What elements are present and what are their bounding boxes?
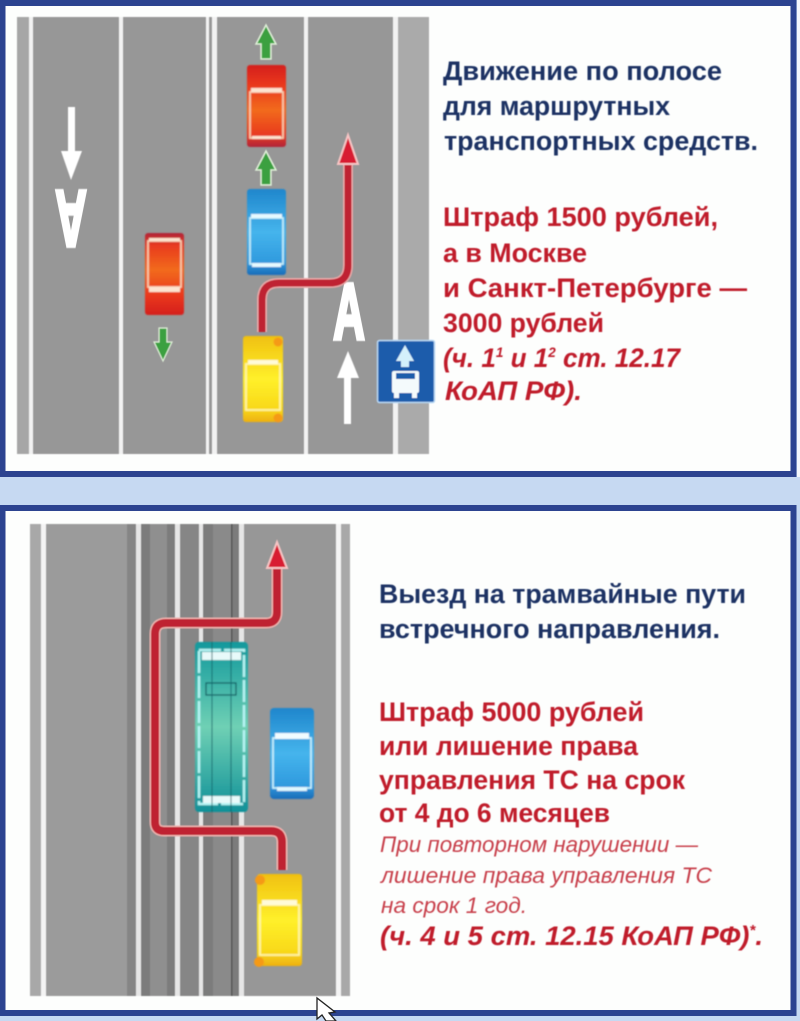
road marking: letter A: А bbox=[333, 267, 365, 356]
heading: tram tracks violation: Выезд на трамвайные пути bbox=[379, 579, 746, 609]
text: law reference: * bbox=[749, 922, 757, 939]
text: repeat offence note: При повторном нарушении — bbox=[380, 832, 699, 857]
text: law reference: (ч. 4 и 5 ст. 12.15 КоАП РФ) bbox=[380, 921, 743, 951]
text: bus lane fine: ст. 12.17 bbox=[556, 343, 682, 373]
road: tram tracks scene bbox=[30, 524, 350, 996]
text: repeat offence note bbox=[379, 832, 712, 918]
text: bus lane fine: Штраф 1500 рублей, bbox=[443, 202, 718, 232]
panel: bus lane violation bbox=[2, 0, 800, 477]
icon: small green arrow down bbox=[154, 328, 172, 361]
car: red, oncoming bbox=[145, 233, 184, 315]
bus: teal bbox=[195, 642, 248, 812]
text: repeat offence note: лишение права управления ТС bbox=[379, 863, 712, 888]
heading: bus lane violation: транспортных средств. bbox=[444, 126, 758, 156]
text: law reference: . bbox=[755, 921, 763, 951]
text: bus lane fine: и Санкт-Петербурге — bbox=[443, 273, 747, 303]
heading: bus lane violation: для маршрутных bbox=[443, 91, 670, 121]
panel: tram tracks violation bbox=[2, 508, 794, 1013]
text: bus lane fine: 3000 рублей bbox=[443, 308, 604, 338]
text: bus lane fine: и 1 bbox=[503, 343, 548, 373]
road: bus lane scene bbox=[17, 17, 429, 454]
text: bus lane fine: (ч. 1 bbox=[443, 343, 498, 373]
red route arrow: bus lane bbox=[262, 135, 358, 332]
icon: bus lane road sign bbox=[378, 340, 434, 402]
car: blue, alongside bbox=[270, 708, 314, 799]
text: tram tracks fine: управления ТС на срок bbox=[379, 765, 685, 795]
text: bus lane fine: 1 bbox=[496, 344, 504, 360]
text: tram tracks fine: Штраф 5000 рублей bbox=[379, 697, 644, 727]
text: tram tracks fine: от 4 до 6 месяцев bbox=[379, 798, 610, 828]
road marking: upward lane arrow bbox=[337, 351, 359, 424]
text: bus lane fine: 2 bbox=[547, 344, 556, 360]
icon: green arrow ahead of top red car bbox=[256, 25, 276, 59]
heading: tram tracks violation: встречного направления. bbox=[379, 614, 720, 644]
heading: bus lane violation: Движение по полосе bbox=[443, 56, 722, 86]
car: red, top bbox=[247, 65, 286, 147]
heading: tram tracks violation bbox=[379, 579, 746, 644]
road marking: downward lane arrow bbox=[61, 107, 82, 180]
text: tram tracks fine: или лишение права bbox=[379, 731, 639, 761]
text: bus lane fine: а в Москве bbox=[443, 238, 587, 268]
text: tram tracks fine bbox=[379, 697, 685, 828]
car: yellow violator bbox=[254, 874, 302, 967]
road marking: inverted letter A: А bbox=[55, 174, 87, 263]
icon: mouse cursor bbox=[317, 998, 336, 1021]
red route arrow: tram tracks bbox=[155, 542, 287, 870]
text: bus lane fine: КоАП РФ). bbox=[445, 376, 582, 406]
text: repeat offence note: на срок 1 год. bbox=[381, 893, 527, 918]
heading: bus lane violation bbox=[443, 56, 758, 156]
car: yellow violator bbox=[243, 336, 283, 422]
icon: green arrow ahead of blue car bbox=[256, 151, 276, 185]
car: blue, middle bbox=[247, 189, 286, 275]
text: bus lane fine bbox=[443, 202, 747, 406]
